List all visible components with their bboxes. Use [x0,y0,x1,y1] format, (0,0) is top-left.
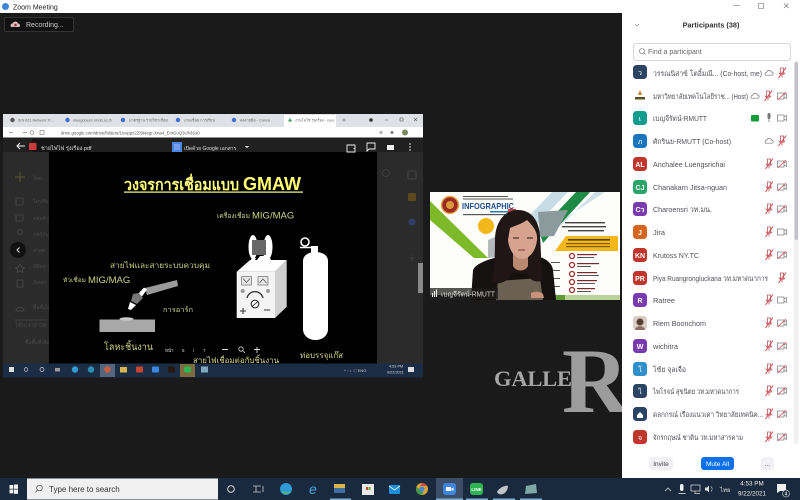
watermark: GALLERY logo: GALLE [494,366,572,391]
participant 3 [633,111,786,125]
drive page, dimmed: ใหม่ [33,175,42,182]
diagram: welding machine box [237,260,287,318]
shared screen: browser window [3,114,423,378]
panel heading [635,20,740,30]
presenter name tag [430,288,498,299]
presenter [471,210,556,300]
browser tab strip [3,114,423,127]
participant 16 [633,407,786,421]
diagram: wire spool [248,235,272,264]
participant 10: PR [635,276,645,283]
participant 9: KN [635,253,645,260]
participant 11 [633,293,786,307]
system tray: 9/22/2021 [738,490,767,498]
participant 9: Krutoss NY.TC [653,251,699,260]
search box [27,478,218,500]
slide labels [63,261,343,365]
diagram: workpiece [100,317,155,332]
drive page, dimmed: แชร์กับฉัน [33,231,56,238]
drive page, dimmed [3,138,423,364]
search box: Type here to search [49,485,120,494]
participant 3: เ [639,116,641,123]
slide title: วงจรการเชื่อมแบบ [124,173,239,194]
PDF slide [49,152,377,365]
participant 3: เบญจีรัตน์-RMUTT [653,114,708,123]
participant 8: J [638,230,642,237]
participant 17 [633,430,786,444]
PDF page controls: หน้า [165,348,174,353]
participant 4: ภ [638,139,643,146]
title bar: Zoom Meeting [13,4,58,12]
participant 7: Charoensri วท.มน. [653,205,712,214]
poster: logo and heading [442,196,516,215]
participant 7 [633,202,786,216]
participant 17: จ [638,435,642,442]
slide labels: MIG/MAG [88,275,130,286]
shared screen taskbar: 9/22/2021 [387,370,404,374]
participant 12: Riem Boonchom [653,319,706,328]
welding machine label: MIG/MAG [252,210,294,222]
system tray [665,480,790,498]
participant 4: ศักรินย-RMUTT (Co-host) [653,137,731,146]
participant 4 [633,134,786,148]
shared screen taskbar: 4:53 PM [389,364,403,368]
PDF page controls: 7 [203,348,206,353]
browser tab strip: งานโลโซ่ รุ่นเรือง - Goo [295,118,334,124]
more button [761,457,774,470]
participant 10: Piya Ruangrongluckana วท.มหาดนาการ [653,274,768,283]
PDF viewer toolbar: ชายไฟไฟ รุ่งเรือง.pdf [41,145,92,152]
panel heading: Participants (38) [683,20,740,30]
drive page, dimmed: ไดรฟ์ของฉัน [32,198,61,205]
slide labels: สายไฟและสายระบบควบคุม [110,261,210,270]
watermark: GALLERY logo [494,330,630,432]
mute all button: Mute All [706,461,730,468]
diagram: gas cylinder [300,238,328,340]
PDF viewer toolbar [3,138,423,152]
participant 14 [633,362,786,376]
slide labels: โลหะชิ้นงาน [104,340,153,353]
PDF page controls: 5 [182,348,185,353]
participant 2 [633,89,786,103]
PDF page controls: / [193,348,195,353]
participant 2: มหาวิทยาลัยเทคโนโลยีราช... (Host) [653,92,748,101]
invite button [649,457,673,470]
browser tab strip: IEN 811 Network Tr... [18,118,54,122]
participant 15 [633,384,786,398]
slide labels: สายไฟเชื่อมต่อกับชิ้นงาน [193,354,280,365]
participants panel [622,13,800,478]
browser tab strip: ลงลายมือ - Canva [240,118,271,122]
mute all button [701,457,734,470]
browser tab strip: งานเชื่อม การเรียน [184,118,215,122]
participant 1: ว [638,70,642,77]
search box [634,44,790,60]
browser address bar: drive.google.com/drive/folders/1ixoppz2ZI9t4egr-Xna4_EmGoQ3Uh3Ss0 [61,130,200,136]
participant 14: โซ้ย จุลเจือ [653,365,686,374]
system tray: 4 [784,492,788,498]
slide labels: หัวเชื่อม [63,276,86,284]
participant 12 [633,316,786,330]
participant 5 [633,157,786,171]
participant 1 [633,65,786,79]
participant 17: จักรกฤษณ์ ชาติน วท.มหาสารคาม [653,433,743,442]
shared screen taskbar [3,364,423,378]
drive page, dimmed: พื้นที่เก็บข้อมูล [33,302,64,311]
participant 5: AL [635,162,645,169]
drive page, dimmed: คอมพิวเตอร์ [33,215,60,222]
presenter name tag: เบญจีรัตน์-RMUTT [441,290,496,298]
participant 6: CJ [636,185,645,192]
participant list [633,65,786,444]
slide title: GMAW [243,174,301,194]
taskbar apps: LINE [471,487,482,492]
poster: logo and heading: INFOGRAPHIC [462,201,514,211]
shared screen taskbar: ^ ▫ ♪ ◁ ENG [344,368,366,373]
browser tab strip: มาตรฐาน รายวิชาเชื่อม [129,118,168,122]
participant 11: R [637,298,643,305]
participant 14: โ [638,365,642,374]
drive page, dimmed: ที่ติดดาว [33,263,52,270]
watermark: GALLERY logo: R [562,330,630,432]
browser address bar [3,127,423,138]
participant 11: Ratree [653,296,675,305]
taskbar apps: e [309,481,317,497]
participant 15: ไพโรจน์ สุขนิตย วท.มหาดนาการ [652,387,739,396]
diagram: MIG torch [128,280,178,310]
drive page, dimmed: ล่าสุด [33,248,45,254]
taskbar apps [228,478,542,500]
scrollbar [794,61,798,444]
system tray: ไทย [719,486,730,494]
start button [10,484,18,494]
more button: ... [765,461,770,468]
drive page, dimmed: ใช้ไป 4.92 GB [15,322,47,329]
PDF viewer toolbar: เปิดด้วย Google เอกสาร [184,145,237,152]
participant 16: ดลกกรณ์ เรืองแนวเดา วิทยาลัยเทคนิค... [653,410,763,419]
participant 6 [633,180,786,194]
presenter video [430,192,620,300]
participant 10 [633,271,786,285]
system tray: 4:53 PM [740,480,764,488]
drive page, dimmed: ถังขยะ [33,280,48,286]
participant 9 [633,248,786,262]
participant 1: วรรณนิสาข์ โตอิ้มณี... (Co-host, me) [653,68,762,78]
welding machine label: เครื่องเชื่อม [217,211,250,220]
participant 15: ไ [637,387,642,396]
invite button: Invite [653,461,669,468]
participant 7: Cว [636,207,645,214]
windows taskbar [0,478,800,500]
title bar [0,0,800,13]
poster: diagonal stripes and photo [430,192,620,300]
recording indicator [4,18,74,32]
participant 8 [633,225,786,239]
participant 5: Anchalee Luengsrichai [653,160,725,169]
poster: checklist [551,222,610,292]
participant 13 [633,339,786,353]
search box: Find a participant [648,49,702,56]
PDF page controls [165,347,260,353]
slide labels: การอาร์ก [163,306,193,314]
participant 13: wichitra [652,342,678,351]
participant 6: Chanakarn Jitsa-nguan [653,183,727,192]
slide title [124,173,303,194]
recording indicator: Recording... [26,22,64,29]
drive page, dimmed: ซื้อพื้นที่เพิ่ม [25,337,50,346]
participant 13: W [637,344,644,351]
slide labels: ท่อบรรจุแก๊ส [300,350,343,360]
browser tab strip: meegdoesn.rmutt.ac.th [73,118,112,122]
welding machine label [217,210,294,222]
participant 8: Jira [653,228,665,237]
